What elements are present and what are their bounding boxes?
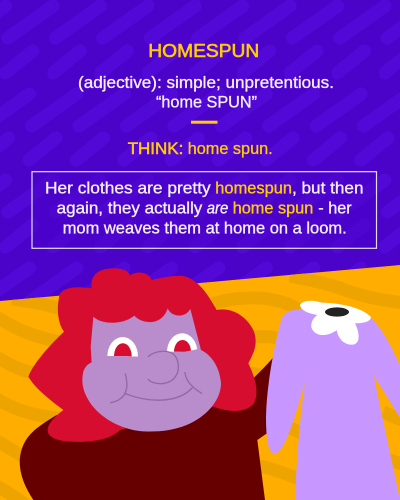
example sentence box: again, they actually [57,199,203,217]
divider [191,121,218,124]
puppet flower [300,301,371,345]
example sentence box: are [207,199,228,217]
think line: THINK: [128,139,183,158]
facial lines [111,351,202,403]
think line [128,139,273,158]
eyes [107,337,138,357]
example sentence box [32,172,376,248]
puppet eye [325,307,349,317]
title: HOMESPUN [148,40,259,61]
hair [28,268,256,442]
example sentence box: homespun [215,179,292,197]
definition: (adjective): simple; unpretentious. [78,73,334,92]
character: girl [20,268,277,500]
cheeks and chin [82,349,221,431]
orange floor with waves [0,265,400,500]
example sentence box: mom weaves them at home on a loom. [63,219,347,237]
example sentence box: - her [318,199,352,217]
definition [78,73,334,112]
example sentence box: , but then [292,179,364,197]
example sentence box: home spun [233,199,313,217]
face [82,308,221,431]
hand puppet [266,301,400,500]
example sentence box: Her clothes are pretty [45,179,211,197]
definition: “home SPUN” [156,92,257,112]
think line: home spun. [188,139,273,158]
body [20,353,277,500]
